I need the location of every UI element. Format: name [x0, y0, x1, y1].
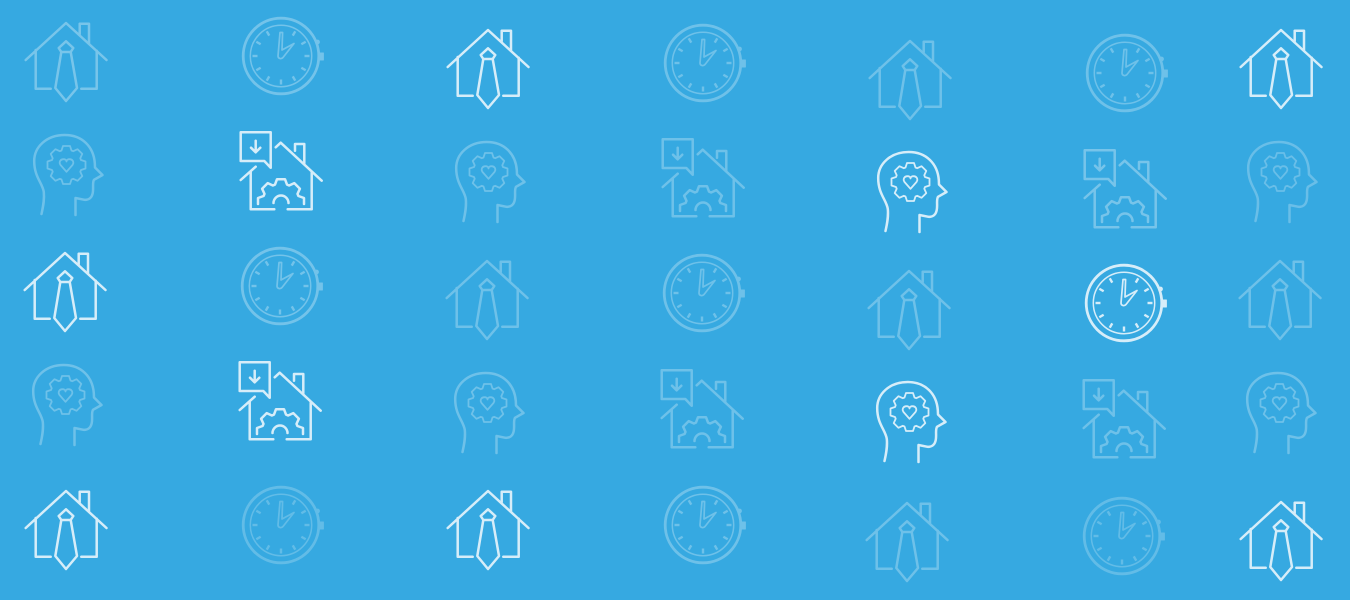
row 1 icon: house with tie — [26, 23, 107, 101]
row 3 icon: clock (col 4) — [664, 255, 744, 331]
row 1 icon: clock — [243, 18, 323, 94]
row 1 icon: house with tie (col 7, bright) — [1241, 30, 1322, 108]
row 1 icon: house with tie (bright) — [448, 30, 528, 108]
row 5 icon: house with tie (col 7, bright) — [1241, 502, 1322, 580]
row 1 icon: house with tie (col 5) — [870, 41, 950, 119]
row 4 icon: home with gear (col 2, bright) — [240, 362, 321, 439]
row 5 icon: clock (col 6) — [1084, 498, 1164, 574]
row 5 icon: house with tie (col 5) — [867, 503, 948, 581]
row 4 icon: home with gear (col 6) — [1084, 380, 1165, 457]
row 5 icon: house with tie (col 3, bright) — [448, 491, 528, 569]
row 3 icon: clock (col 6, bright) — [1086, 265, 1166, 341]
row 4 icon: head with gear (col 3) — [455, 373, 524, 453]
row 3 icon: house with tie (bright) — [25, 253, 106, 331]
row 4 icon: home with gear (col 4) — [662, 370, 743, 447]
row 2 icon: head with gear (col 7) — [1248, 142, 1316, 222]
row 4 icon: head with gear (col 1) — [33, 365, 102, 445]
row 5 icon: clock (col 2) — [243, 487, 323, 563]
row 2 icon: head with gear and heart — [34, 135, 103, 215]
row 2 icon: home with gear (col 6) — [1085, 150, 1166, 227]
row 4 icon: head with gear (col 7) — [1247, 373, 1316, 453]
row 3 icon: house with tie (col 5) — [869, 271, 950, 349]
row 2 icon: head with gear (col 5, bright) — [878, 152, 946, 232]
row 5 icon: house with tie (col 1, bright) — [26, 491, 107, 569]
row 3 icon: house with tie (col 3) — [447, 261, 528, 339]
row 3 icon: clock (col 2) — [242, 248, 322, 324]
row 1 icon: clock (col 6) — [1087, 35, 1167, 111]
row 4 icon: head with gear (col 5, bright) — [877, 382, 946, 462]
row 1 icon: clock (col 4) — [665, 25, 745, 101]
row 5 icon: clock (col 4) — [665, 487, 745, 563]
row 3 icon: house with tie (col 7) — [1240, 261, 1320, 339]
row 2 icon: home with gear and download bubble (bright) — [241, 132, 322, 209]
row 2 icon: home with gear (col 4) — [663, 139, 744, 216]
row 2 icon: head with gear (col 3) — [456, 142, 524, 222]
